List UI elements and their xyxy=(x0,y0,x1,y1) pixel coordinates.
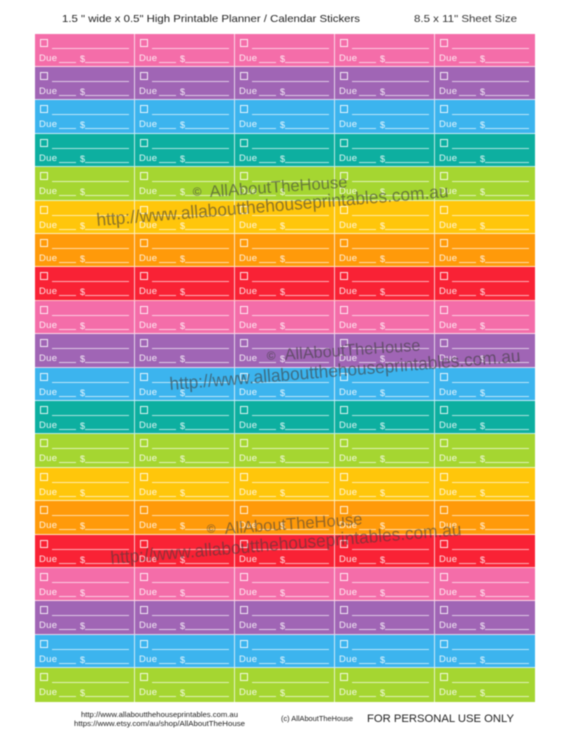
sticker row 18: purple: Due xyxy=(139,620,157,631)
sticker row 12: teal: Due xyxy=(239,420,257,431)
sticker row 20: green: $ xyxy=(80,688,85,698)
sticker row 4: teal xyxy=(35,134,535,167)
sticker row 2: purple: $ xyxy=(280,87,285,97)
sticker row 18: purple: $ xyxy=(80,621,85,631)
sticker row 7: orange: $ xyxy=(80,254,85,264)
sticker row 16: red: Due xyxy=(339,554,357,565)
sticker row 12: teal: $ xyxy=(280,421,285,431)
sticker row 16: red: $ xyxy=(480,555,485,565)
watermark 1: © xyxy=(192,184,202,199)
footer website links: https://www.etsy.com/au/shop/AllAboutTheHouse xyxy=(74,719,245,728)
sticker row 18: purple: $ xyxy=(180,621,185,631)
sticker row 11: blue: $ xyxy=(180,388,185,398)
sticker row 8: red xyxy=(35,267,535,301)
sticker row 20: green: Due xyxy=(239,687,257,698)
sticker row 11: blue: Due xyxy=(139,387,157,398)
sticker row 13: green: $ xyxy=(180,454,185,464)
sticker: Due xyxy=(139,53,157,64)
sticker row 14: yellow: Due xyxy=(39,487,57,498)
sticker row 11: blue: $ xyxy=(80,388,85,398)
sticker row 18: purple: Due xyxy=(439,620,457,631)
sticker row 2: purple: Due xyxy=(339,86,357,97)
sticker row 15: orange: Due xyxy=(339,520,357,531)
sticker row 13: green: Due xyxy=(239,453,257,464)
sticker row 18: purple: $ xyxy=(280,621,285,631)
sticker row 13: green: $ xyxy=(280,454,285,464)
sticker row 2: purple: $ xyxy=(80,87,85,97)
sticker: $ xyxy=(180,54,185,64)
sticker row 13: green: Due xyxy=(439,453,457,464)
sticker row 17: pink: $ xyxy=(380,588,385,598)
sticker row 12: teal: $ xyxy=(380,421,385,431)
sticker row 14: yellow: $ xyxy=(480,488,485,498)
sticker row 12: teal xyxy=(35,401,535,434)
watermark 3: http://www.allaboutthehouseprintables.com.au xyxy=(110,519,462,568)
sticker row 15: orange: $ xyxy=(480,521,485,531)
sticker row 19: blue: Due xyxy=(139,654,157,665)
sticker xyxy=(435,34,535,67)
sticker row 2: purple: $ xyxy=(480,87,485,97)
sticker row 6: yellow: Due xyxy=(39,220,57,231)
sticker row 10: purple: Due xyxy=(239,353,257,364)
sticker row 2: purple: Due xyxy=(239,86,257,97)
sticker row 6: yellow: $ xyxy=(280,221,285,231)
sticker row 4: teal: Due xyxy=(239,153,257,164)
sticker row 11: blue: $ xyxy=(280,388,285,398)
sticker row 13: green xyxy=(35,434,535,468)
sticker row 15: orange: Due xyxy=(139,520,157,531)
footer website links: http://www.allaboutthehouseprintables.com.au xyxy=(81,710,238,719)
sticker row 3: blue xyxy=(35,100,535,134)
sticker row 2: purple: Due xyxy=(139,86,157,97)
sticker row 6: yellow: Due xyxy=(139,220,157,231)
sticker row 5: green xyxy=(35,167,535,201)
sticker row 7: orange: Due xyxy=(239,253,257,264)
sticker row 14: yellow: $ xyxy=(180,488,185,498)
sticker row 17: pink: $ xyxy=(480,588,485,598)
personal use notice: FOR PERSONAL USE ONLY xyxy=(367,713,515,725)
sticker row 8: red: Due xyxy=(339,286,357,297)
sticker row 16: red: $ xyxy=(80,555,85,565)
sticker row 6: yellow: Due xyxy=(439,220,457,231)
sticker row 5: green: $ xyxy=(80,187,85,197)
sticker row 11: blue: Due xyxy=(39,387,57,398)
sticker row 3: blue: $ xyxy=(280,120,285,130)
footer copyright: (c) AllAboutTheHouse xyxy=(281,714,353,723)
sticker row 8: red: Due xyxy=(139,286,157,297)
sticker row 5: green: $ xyxy=(180,187,185,197)
sticker row 13: green: Due xyxy=(39,453,57,464)
sticker row 7: orange: $ xyxy=(480,254,485,264)
sticker row 14: yellow: $ xyxy=(280,488,285,498)
sticker row 9: pink: Due xyxy=(39,320,57,331)
sticker row 20: green: $ xyxy=(480,688,485,698)
sticker row 20: green: $ xyxy=(380,688,385,698)
sticker row 17: pink: Due xyxy=(439,587,457,598)
sticker xyxy=(235,34,335,67)
sticker row 6: yellow: $ xyxy=(180,221,185,231)
sticker row 6: yellow: Due xyxy=(339,220,357,231)
sticker row 9: pink: $ xyxy=(380,321,385,331)
sticker row 9: pink: $ xyxy=(280,321,285,331)
sticker row 6: yellow: $ xyxy=(80,221,85,231)
watermark 1: http://www.allaboutthehouseprintables.com.au xyxy=(96,181,449,230)
sticker row 3: blue: Due xyxy=(339,119,357,130)
sticker row 3: blue: Due xyxy=(139,119,157,130)
sticker row 14: yellow xyxy=(35,468,535,501)
sticker row 19: blue: $ xyxy=(80,655,85,665)
sticker row 6: yellow: $ xyxy=(480,221,485,231)
sticker row 17: pink: Due xyxy=(339,587,357,598)
sticker: Due xyxy=(39,53,57,64)
sticker row 9: pink: Due xyxy=(139,320,157,331)
sticker row 2: purple: Due xyxy=(39,86,57,97)
sticker row 17: pink xyxy=(35,568,535,601)
sticker row 10: purple: Due xyxy=(139,353,157,364)
sticker row 17: pink: Due xyxy=(139,587,157,598)
sticker row 10: purple: Due xyxy=(439,353,457,364)
sticker row 12: teal: $ xyxy=(480,421,485,431)
sticker row 16: red: $ xyxy=(380,555,385,565)
sticker row 7: orange: $ xyxy=(180,254,185,264)
sticker row 6: yellow xyxy=(35,201,535,234)
sticker row 19: blue: Due xyxy=(439,654,457,665)
sticker row 12: teal: $ xyxy=(80,421,85,431)
sticker row 10: purple: $ xyxy=(480,354,485,364)
sticker row 19: blue: Due xyxy=(239,654,257,665)
watermark 2: http://www.allaboutthehouseprintables.com.au xyxy=(169,346,521,394)
sheet size: 8.5 x 11" Sheet Size xyxy=(414,13,517,25)
sticker row 5: green: Due xyxy=(239,186,257,197)
sticker row 8: red: Due xyxy=(439,286,457,297)
sticker row 14: yellow: $ xyxy=(380,488,385,498)
sticker: $ xyxy=(480,54,485,64)
sticker row 12: teal: Due xyxy=(439,420,457,431)
sticker row 19: blue: $ xyxy=(480,655,485,665)
sticker row 14: yellow: Due xyxy=(439,487,457,498)
sticker row 9: pink xyxy=(35,301,535,334)
sticker row 15: orange: $ xyxy=(80,521,85,531)
sticker row 7: orange: Due xyxy=(39,253,57,264)
sticker row 12: teal: Due xyxy=(39,420,57,431)
sticker row 8: red: Due xyxy=(39,286,57,297)
sticker row 19: blue: $ xyxy=(380,655,385,665)
sticker row 19: blue: Due xyxy=(39,654,57,665)
sticker row 15: orange: Due xyxy=(39,520,57,531)
sticker row 8: red: $ xyxy=(180,287,185,297)
title: 1.5 " wide x 0.5" High Printable Planner / Calendar Stickers xyxy=(62,13,360,25)
sticker row 18: purple xyxy=(35,601,535,635)
sticker row 2: purple xyxy=(35,67,535,100)
sticker row 3: blue: $ xyxy=(80,120,85,130)
footer website links xyxy=(74,710,245,728)
sticker: Due xyxy=(239,53,257,64)
sticker row 17: pink: $ xyxy=(180,588,185,598)
sticker row 11: blue: Due xyxy=(439,387,457,398)
sticker row 9: pink: Due xyxy=(439,320,457,331)
sticker row 5: green: Due xyxy=(139,186,157,197)
sticker row 5: green: $ xyxy=(480,187,485,197)
sticker row 13: green: Due xyxy=(339,453,357,464)
sticker row 5: green: Due xyxy=(39,186,57,197)
sticker row 3: blue: $ xyxy=(480,120,485,130)
sticker row 4: teal: $ xyxy=(180,154,185,164)
sticker row 16: red: Due xyxy=(239,554,257,565)
sticker row 9: pink: Due xyxy=(239,320,257,331)
sticker row 14: yellow: Due xyxy=(139,487,157,498)
sticker row 7: orange xyxy=(35,234,535,267)
sticker row 13: green: Due xyxy=(139,453,157,464)
sticker: Due xyxy=(439,53,457,64)
sticker: $ xyxy=(280,54,285,64)
sticker row 17: pink: $ xyxy=(280,588,285,598)
sticker row 7: orange: Due xyxy=(439,253,457,264)
watermark 2: © xyxy=(266,348,276,363)
sticker row 4: teal: Due xyxy=(339,153,357,164)
sticker row 11: blue: $ xyxy=(480,388,485,398)
sticker row 4: teal: $ xyxy=(480,154,485,164)
sticker row 4: teal: $ xyxy=(80,154,85,164)
sticker row 16: red: $ xyxy=(180,555,185,565)
sticker row 16: red: Due xyxy=(39,554,57,565)
sticker row 8: red: $ xyxy=(480,287,485,297)
watermark 2: AllAboutTheHouse xyxy=(284,337,421,364)
sticker row 2: purple: $ xyxy=(180,87,185,97)
sticker row 20: green: Due xyxy=(39,687,57,698)
sticker row 9: pink: Due xyxy=(339,320,357,331)
sticker row 18: purple: $ xyxy=(380,621,385,631)
sticker row 20: green: $ xyxy=(180,688,185,698)
sticker row 4: teal: $ xyxy=(380,154,385,164)
sticker row 18: purple: Due xyxy=(39,620,57,631)
sticker row 18: purple: Due xyxy=(239,620,257,631)
watermark 3: © xyxy=(206,521,216,536)
sticker row 8: red: Due xyxy=(239,286,257,297)
sticker row 3: blue: Due xyxy=(39,119,57,130)
watermark 1: AllAboutTheHouse xyxy=(209,173,348,201)
sticker row 14: yellow: Due xyxy=(339,487,357,498)
sticker: $ xyxy=(380,54,385,64)
sticker row 15: orange: Due xyxy=(239,520,257,531)
sticker row 5: green: $ xyxy=(280,187,285,197)
sticker row 5: green: Due xyxy=(339,186,357,197)
sticker row 3: blue: Due xyxy=(439,119,457,130)
sticker row 13: green: $ xyxy=(380,454,385,464)
sticker row 15: orange xyxy=(35,501,535,535)
sticker row 6: yellow: $ xyxy=(380,221,385,231)
sticker row 10: purple: $ xyxy=(80,354,85,364)
sticker row 9: pink: $ xyxy=(80,321,85,331)
sticker row 10: purple: $ xyxy=(180,354,185,364)
sticker row 10: purple: $ xyxy=(380,354,385,364)
sticker xyxy=(335,34,435,67)
sticker row 12: teal: Due xyxy=(339,420,357,431)
sticker row 13: green: $ xyxy=(480,454,485,464)
sticker row 19: blue: $ xyxy=(280,655,285,665)
sticker row 14: yellow: $ xyxy=(80,488,85,498)
sticker row 3: blue: Due xyxy=(239,119,257,130)
sticker row 7: orange: Due xyxy=(339,253,357,264)
sticker row 7: orange: $ xyxy=(380,254,385,264)
sticker row 9: pink: $ xyxy=(180,321,185,331)
sticker row 16: red: $ xyxy=(280,555,285,565)
sticker row 11: blue: Due xyxy=(239,387,257,398)
sticker row 17: pink: $ xyxy=(80,588,85,598)
sticker row 14: yellow: Due xyxy=(239,487,257,498)
sticker row 20: green: $ xyxy=(280,688,285,698)
sticker row 4: teal: Due xyxy=(39,153,57,164)
sticker row 17: pink: Due xyxy=(239,587,257,598)
sticker row 19: blue: Due xyxy=(339,654,357,665)
sticker row 9: pink: $ xyxy=(480,321,485,331)
sticker row 7: orange: $ xyxy=(280,254,285,264)
sticker row 8: red: $ xyxy=(80,287,85,297)
sticker row 12: teal: Due xyxy=(139,420,157,431)
sticker row 19: blue: $ xyxy=(180,655,185,665)
sticker row 16: red: Due xyxy=(139,554,157,565)
sticker row 5: green: $ xyxy=(380,187,385,197)
sticker row 4: teal: $ xyxy=(280,154,285,164)
sticker row 17: pink: Due xyxy=(39,587,57,598)
sticker row 3: blue: $ xyxy=(180,120,185,130)
sticker row 1: pink xyxy=(35,34,535,67)
sticker row 4: teal: Due xyxy=(139,153,157,164)
sticker row 15: orange: $ xyxy=(280,521,285,531)
sticker row 13: green: $ xyxy=(80,454,85,464)
sticker row 11: blue: Due xyxy=(339,387,357,398)
sticker row 5: green: Due xyxy=(439,186,457,197)
sticker row 2: purple: Due xyxy=(439,86,457,97)
sticker row 12: teal: $ xyxy=(180,421,185,431)
sticker row 3: blue: $ xyxy=(380,120,385,130)
sticker xyxy=(35,34,135,67)
sticker row 20: green xyxy=(35,668,535,702)
sticker row 10: purple: Due xyxy=(39,353,57,364)
sticker row 18: purple: $ xyxy=(480,621,485,631)
sticker row 8: red: $ xyxy=(280,287,285,297)
sticker row 2: purple: $ xyxy=(380,87,385,97)
sticker row 20: green: Due xyxy=(439,687,457,698)
sticker row 11: blue xyxy=(35,368,535,401)
sticker row 8: red: $ xyxy=(380,287,385,297)
sticker row 15: orange: Due xyxy=(439,520,457,531)
sticker row 11: blue: $ xyxy=(380,388,385,398)
sticker: Due xyxy=(339,53,357,64)
sticker row 16: red xyxy=(35,535,535,568)
sticker row 4: teal: Due xyxy=(439,153,457,164)
sticker row 10: purple: Due xyxy=(339,353,357,364)
watermark 3: AllAboutTheHouse xyxy=(224,510,363,538)
sticker row 10: purple xyxy=(35,334,535,368)
sticker row 19: blue xyxy=(35,635,535,668)
sticker row 20: green: Due xyxy=(339,687,357,698)
sticker row 6: yellow: Due xyxy=(239,220,257,231)
sticker row 16: red: Due xyxy=(439,554,457,565)
sticker row 15: orange: $ xyxy=(180,521,185,531)
sticker row 10: purple: $ xyxy=(280,354,285,364)
sticker row 20: green: Due xyxy=(139,687,157,698)
sticker row 18: purple: Due xyxy=(339,620,357,631)
sticker row 15: orange: $ xyxy=(380,521,385,531)
sticker: $ xyxy=(80,54,85,64)
sticker xyxy=(135,34,235,67)
sticker row 7: orange: Due xyxy=(139,253,157,264)
